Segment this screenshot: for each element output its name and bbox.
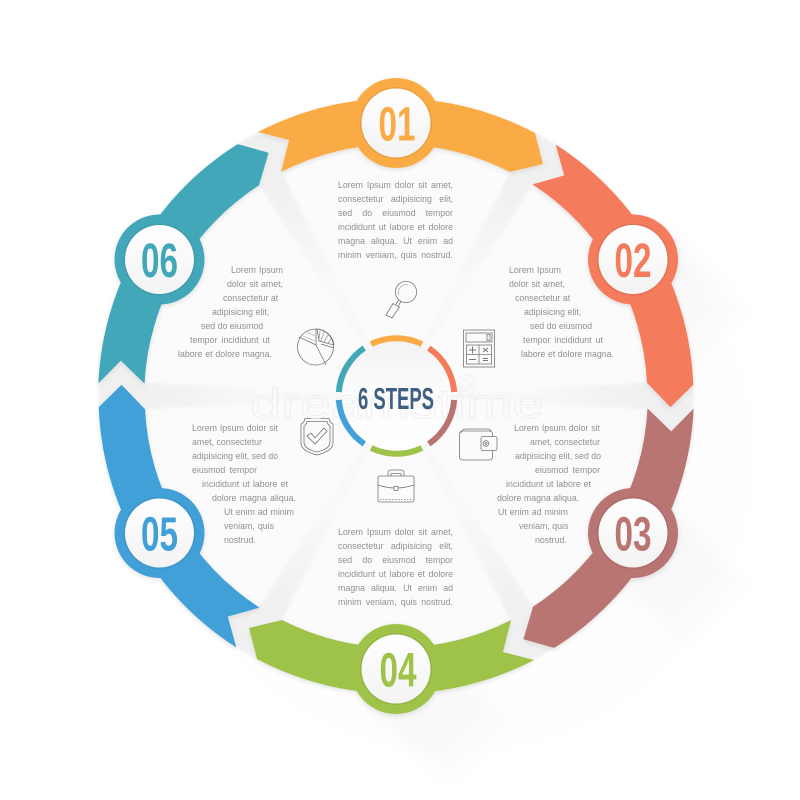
step 04 arrow and badge: [249, 620, 534, 714]
icon: magnifying glass: [386, 281, 417, 318]
step 05 arrow and badge: 05: [141, 508, 178, 562]
text block: step 03: Lorem Ipsum dolor sit: [514, 423, 600, 433]
text block: step 05: eiusmod tempor: [192, 465, 257, 475]
step 05 arrow and badge: [65, 381, 271, 664]
text block: step 03: Ut enim ad minim: [498, 507, 568, 517]
text block: step 06: adipisicing elit,: [212, 307, 269, 317]
step 03 arrow and badge: [516, 388, 723, 672]
text block: step 01: consectetur adipisicing elit,: [338, 194, 453, 204]
text block: step 05: Ut enim ad minim: [224, 507, 294, 517]
watermark: [250, 375, 544, 427]
text block: step 01: sed do eiusmod tempor: [338, 208, 453, 218]
text block: step 06: labore et dolore magna.: [178, 349, 272, 359]
text block: step 05: dolore magna aliqua.: [212, 493, 296, 503]
text block: step 03: dolore magna aliqua.: [497, 493, 579, 503]
center hub disc: [342, 341, 452, 451]
text block: step 04: sed do eiusmod tempor: [338, 555, 453, 565]
slice gaps and spokes: [84, 119, 708, 673]
center ring and title: [334, 338, 459, 454]
long shadows of badges 02, 03 and 04: [364, 227, 750, 786]
text block: step 04: incididunt ut labore et dolore: [338, 569, 453, 579]
step 06 arrow and badge: [69, 120, 276, 404]
text block: step 06: consectetur at: [223, 293, 278, 303]
step 03 arrow and badge: 03: [614, 508, 652, 562]
text block: step 02: labore et dolore magna.: [521, 349, 614, 359]
text block: step 02: dolor sit amet,: [509, 279, 565, 289]
center title: 6 STEPS: [358, 381, 434, 416]
icon: wallet: [460, 429, 497, 460]
text block: step 03: [497, 423, 601, 545]
text block: step 05: incididunt ut labore et: [202, 479, 288, 489]
watermark: dreamstime: [250, 380, 544, 427]
icon: pie chart: [298, 329, 334, 365]
step 04 arrow and badge: 04: [380, 644, 417, 698]
text block: step 03: amet, consectetur: [530, 437, 600, 447]
text block: step 05: amet, consectetur: [192, 437, 262, 447]
text block: step 03: incididunt ut labore et: [506, 479, 591, 489]
text block: step 02: consectetur at: [515, 293, 570, 303]
text block: step 05: Lorem Ipsum dolor sit: [192, 423, 278, 433]
icon: calculator: [464, 330, 494, 367]
text block: step 01: Lorem Ipsum dolor sit amet,: [338, 180, 453, 190]
text block: step 01: minim veniam, quis nostrud.: [338, 250, 453, 260]
icon: shield with check: [301, 418, 333, 455]
text block: step 05: nostrud.: [224, 535, 256, 545]
text block: step 03: eiusmod tempor: [535, 465, 600, 475]
text block: step 03: adipisicing elit, sed do: [515, 451, 601, 461]
text block: step 05: veniam, quis: [224, 521, 274, 531]
text block: step 01: incididunt ut labore et dolore: [338, 222, 453, 232]
text block: step 04: minim veniam, quis nostrud.: [338, 597, 453, 607]
step 01 arrow and badge: [258, 78, 543, 172]
text block: step 03: nostrud.: [535, 535, 567, 545]
text block: step 06: Lorem Ipsum: [231, 265, 283, 275]
text block: step 04: consectetur adipisicing elit,: [338, 541, 453, 551]
background disc of six slices: [143, 143, 649, 649]
text block: step 06: tempor incididunt ut: [190, 335, 270, 345]
text block: step 03: veniam, quis: [519, 521, 568, 531]
step 02 arrow and badge: [521, 128, 727, 411]
text block: step 02: tempor incididunt ut: [523, 335, 603, 345]
icon: briefcase: [378, 470, 414, 502]
step 06 arrow and badge: 06: [141, 235, 178, 288]
step 01 arrow and badge: 01: [378, 98, 416, 152]
text block: step 01: [338, 180, 453, 260]
text block: step 02: adipisicing elit,: [524, 307, 581, 317]
text block: step 06: sed do eiusmod: [201, 321, 263, 331]
text block: step 01: magna aliqua. Ut enim ad: [338, 236, 453, 246]
text block: step 05: adipisicing elit, sed do: [192, 451, 278, 461]
text block: step 02: Lorem Ipsum: [509, 265, 561, 275]
long shadow of the ring: [108, 108, 754, 754]
text block: step 02: sed do eiusmod: [530, 321, 592, 331]
text block: step 04: [338, 527, 453, 607]
step 02 arrow and badge: 02: [614, 235, 652, 288]
text block: step 05: [192, 423, 296, 545]
text block: step 04: Lorem Ipsum dolor sit amet,: [338, 527, 453, 537]
text block: step 06: dolor sit amet,: [227, 279, 283, 289]
text block: step 04: magna aliqua. Ut enim ad: [338, 583, 453, 593]
text block: step 02: [509, 265, 614, 359]
text block: step 06: [178, 265, 283, 359]
